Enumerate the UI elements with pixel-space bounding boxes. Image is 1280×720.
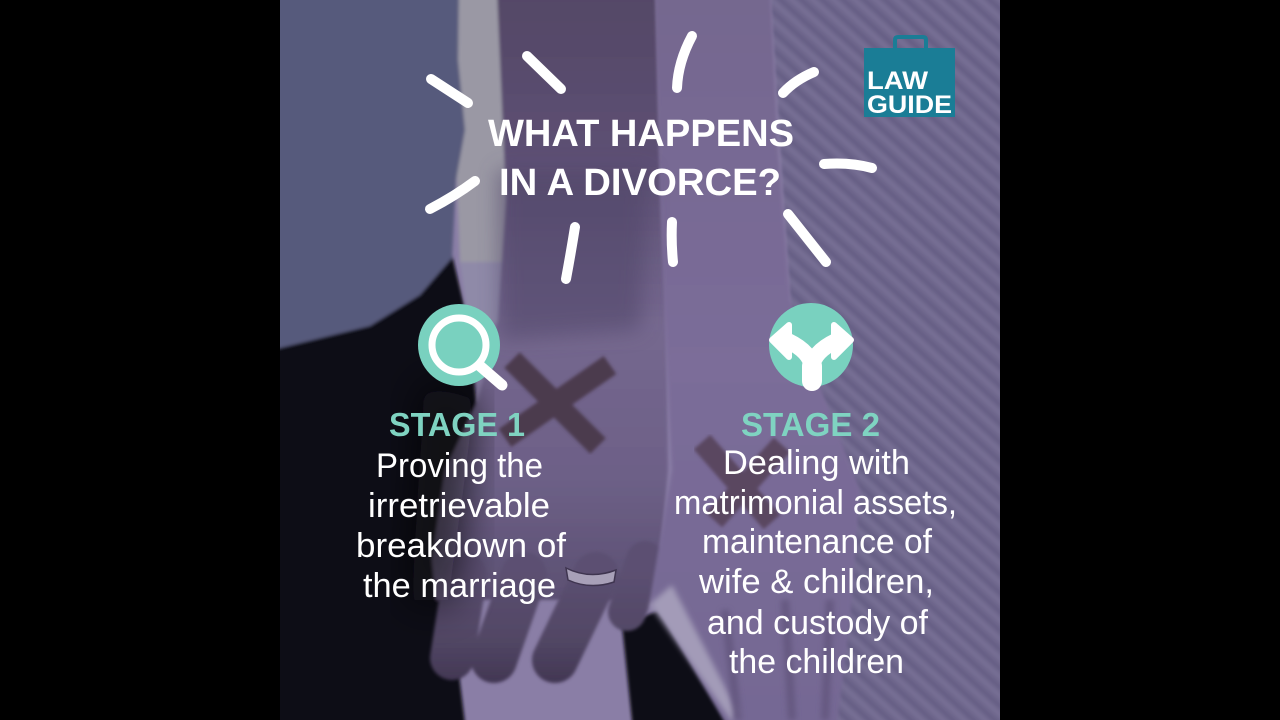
title: IN A DIVORCE? <box>499 162 781 204</box>
stage 1 text: breakdown of <box>356 527 567 565</box>
infographic canvas <box>280 0 1000 720</box>
logo: Law Guide: GUIDE <box>867 91 952 119</box>
dark wedge between hands <box>622 610 745 720</box>
stage 2 text: and custody of <box>707 604 929 642</box>
left fingers <box>452 560 645 660</box>
stage 2 text: STAGE 2 <box>741 406 880 443</box>
stage 2 text: the children <box>729 643 904 681</box>
sunburst rays <box>430 36 872 279</box>
stage 1 text: irretrievable <box>368 487 550 525</box>
ring <box>566 568 616 586</box>
title: WHAT HAPPENS <box>488 113 794 155</box>
logo: Law Guide <box>864 37 955 119</box>
stage 1 text <box>356 406 567 605</box>
right arm and hand <box>650 0 860 720</box>
logo: Law Guide: LAW <box>867 67 928 95</box>
icon: magnifying glass <box>418 304 502 386</box>
title <box>488 113 794 204</box>
stage 1 text: STAGE 1 <box>389 406 525 443</box>
stage 2 text: Dealing with <box>723 444 910 482</box>
photo background: two wrists <box>260 0 1020 720</box>
stage 2 text <box>674 406 957 681</box>
stage 1 text: Proving the <box>376 447 543 485</box>
stage 2 text: maintenance of <box>702 523 933 561</box>
icon: forked road arrows <box>769 303 853 387</box>
stage 2 text: matrimonial assets, <box>674 484 957 522</box>
trousers <box>260 255 480 720</box>
stage 2 text: wife & children, <box>698 563 934 601</box>
gap behind arms <box>456 0 506 263</box>
tape X on right hand <box>702 442 782 522</box>
stage 1 text: the marriage <box>363 567 556 605</box>
cuff highlight <box>650 585 738 720</box>
right hand finger shadows <box>725 600 830 720</box>
tape X on left hand <box>505 360 610 446</box>
left arm and hand <box>432 0 668 600</box>
right sleeve <box>770 0 1020 720</box>
shirt <box>260 0 465 352</box>
